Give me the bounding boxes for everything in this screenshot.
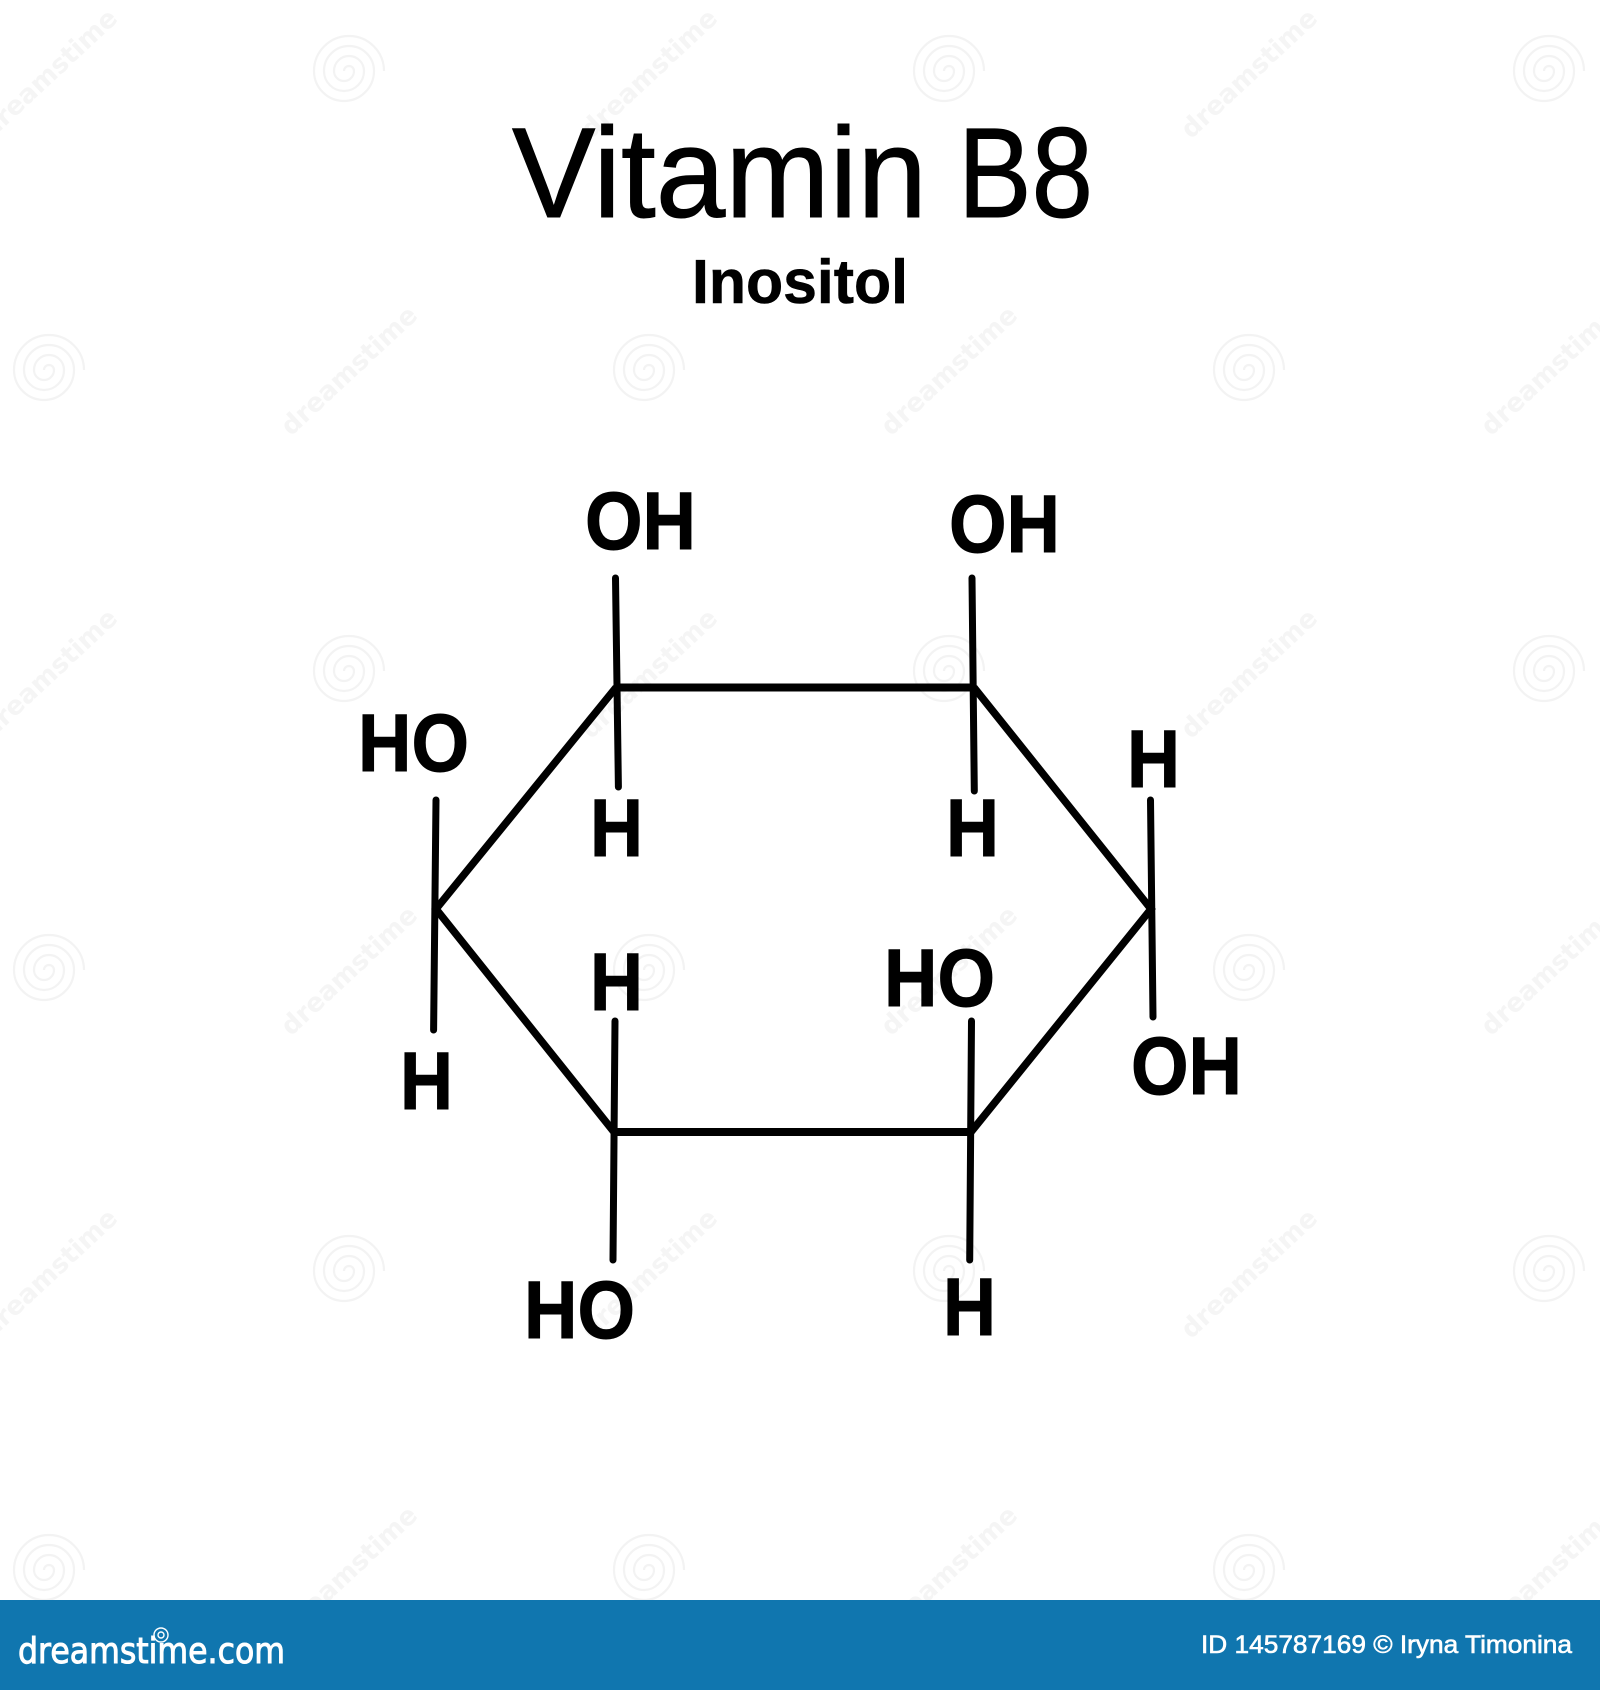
- label: H under top right carbon: H: [946, 783, 999, 874]
- label: HO bottom: HO: [524, 1265, 635, 1356]
- label: OH top left: OH: [585, 476, 696, 567]
- watermark pattern: dreamstime: [1175, 3, 1324, 145]
- label: H lower left: H: [400, 1036, 453, 1127]
- title: Vitamin: [512, 102, 927, 245]
- footer bar: [0, 1600, 1600, 1690]
- watermark pattern: dreamstime: [875, 1500, 1024, 1642]
- watermark pattern: dreamstime: [575, 1203, 724, 1345]
- label: H above bottom left carbon: H: [590, 937, 643, 1028]
- label: HO above bottom right carbon: HO: [884, 933, 995, 1024]
- watermark pattern: dreamstime: [875, 300, 1024, 442]
- watermark pattern: dreamstime: [1175, 1203, 1324, 1345]
- watermark pattern: dreamstime: [575, 603, 724, 745]
- label: OH right: OH: [1131, 1021, 1242, 1112]
- label: OH top right: OH: [949, 479, 1060, 570]
- subtitle: Inositol: [692, 247, 908, 317]
- label: H under top left carbon: H: [590, 783, 643, 874]
- icon: logo spiral: [154, 1628, 168, 1642]
- watermark pattern: dreamstime: [575, 3, 724, 145]
- hexagonal ring: [436, 688, 1151, 1132]
- logo: dreamstime.com: dreamstime.com: [18, 1631, 285, 1672]
- label: H bottom: H: [943, 1262, 996, 1353]
- title: B8: [958, 102, 1093, 245]
- label: H right: H: [1127, 714, 1180, 805]
- watermark pattern: dreamstime: [275, 900, 424, 1042]
- watermark pattern: dreamstime: [275, 1500, 424, 1642]
- label: HO left: HO: [358, 698, 469, 789]
- watermark pattern: dreamstime: [275, 300, 424, 442]
- structural formula: inositol molecule: [358, 476, 1242, 1356]
- image credit: ID 145787169 © Iryna Timonina: [1201, 1632, 1572, 1659]
- watermark pattern: dreamstime: [875, 900, 1024, 1042]
- watermark pattern: dreamstime: [1175, 603, 1324, 745]
- vertical bonds: [434, 578, 1153, 1260]
